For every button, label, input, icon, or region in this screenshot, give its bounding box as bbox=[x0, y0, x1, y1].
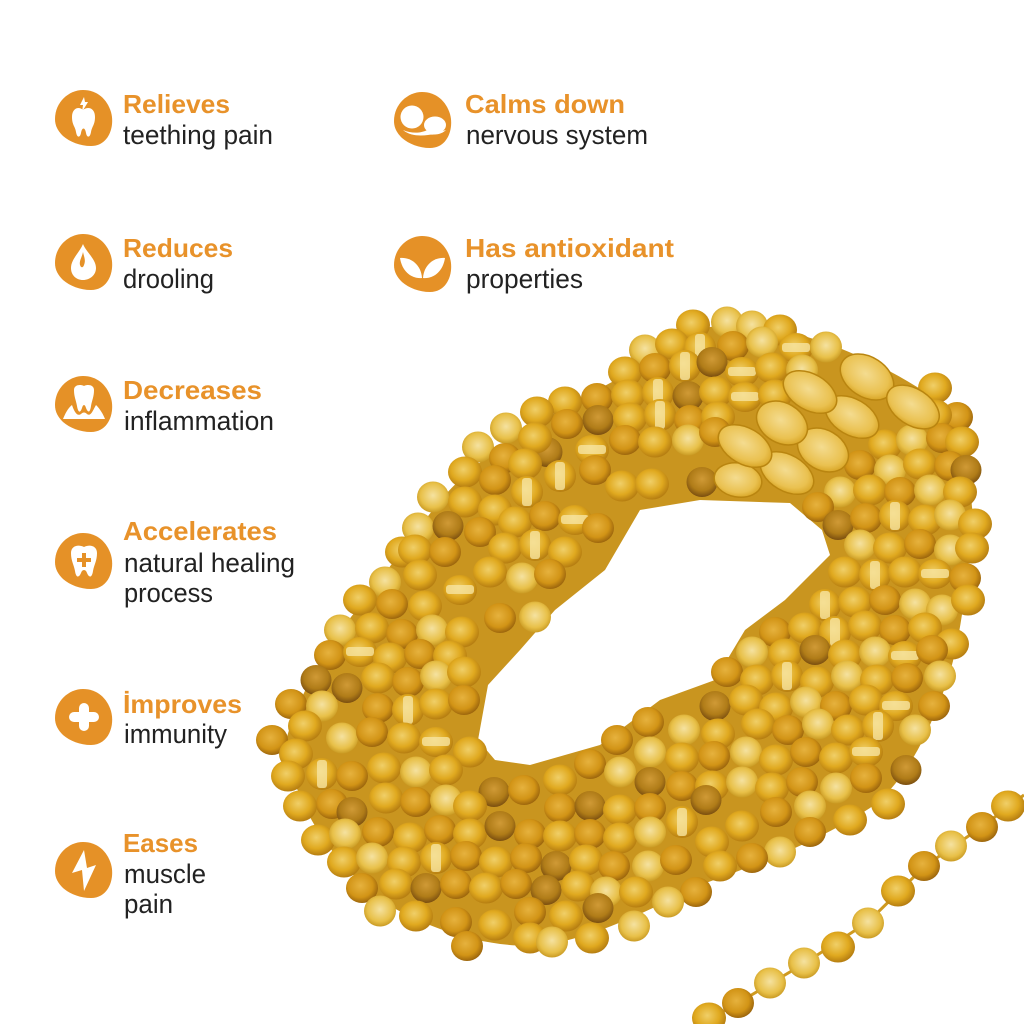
icon: tooth in inflamed gum bbox=[55, 376, 112, 432]
heading: relieves: Relieves bbox=[123, 89, 230, 119]
heading: accelerates: Accelerates bbox=[123, 516, 277, 546]
clasp beads: large oval amber beads bbox=[711, 344, 947, 503]
icon: water drop bbox=[55, 234, 112, 290]
text: muscle: muscle bbox=[124, 859, 206, 889]
text: inflammation: inflammation bbox=[124, 406, 274, 436]
necklace: coiled amber beads bbox=[256, 306, 992, 961]
item: improves immunity bbox=[55, 689, 242, 749]
icon: plus bbox=[55, 689, 112, 745]
heading: decreases: Decreases bbox=[123, 375, 262, 405]
item: decreases inflammation bbox=[55, 375, 274, 436]
panel: benefit list bbox=[55, 89, 674, 919]
item: relieves teething pain bbox=[55, 89, 273, 150]
text: drooling: drooling bbox=[123, 264, 214, 294]
text: process: process bbox=[124, 578, 213, 608]
item: reduces drooling bbox=[55, 233, 233, 294]
text: pain: pain bbox=[124, 889, 173, 919]
item: eases muscle pain bbox=[55, 828, 206, 919]
text: teething pain: teething pain bbox=[123, 120, 273, 150]
heading: has antioxidant: Has antioxidant bbox=[465, 233, 674, 263]
item: accelerates natural healing process bbox=[55, 516, 295, 608]
loose strand: amber beads in lower right corner bbox=[692, 790, 1024, 1024]
icon: sleeping baby bbox=[394, 92, 451, 148]
icon: tooth with plus bbox=[55, 533, 112, 589]
item: calms down nervous system bbox=[394, 89, 648, 150]
heading: improves: İmproves bbox=[123, 689, 242, 719]
text: nervous system: nervous system bbox=[466, 120, 648, 150]
text: natural healing: natural healing bbox=[124, 548, 295, 578]
heading: reduces: Reduces bbox=[123, 233, 233, 263]
item: has antioxidant properties bbox=[394, 233, 674, 294]
icon: tooth with bolt bbox=[55, 90, 112, 146]
heading: calms down: Calms down bbox=[465, 89, 625, 119]
text: properties: properties bbox=[466, 264, 583, 294]
heading: eases: Eases bbox=[123, 828, 198, 858]
text: immunity: immunity bbox=[124, 719, 227, 749]
icon: leaves bbox=[394, 236, 451, 292]
icon: lightning bolt bbox=[55, 842, 112, 898]
